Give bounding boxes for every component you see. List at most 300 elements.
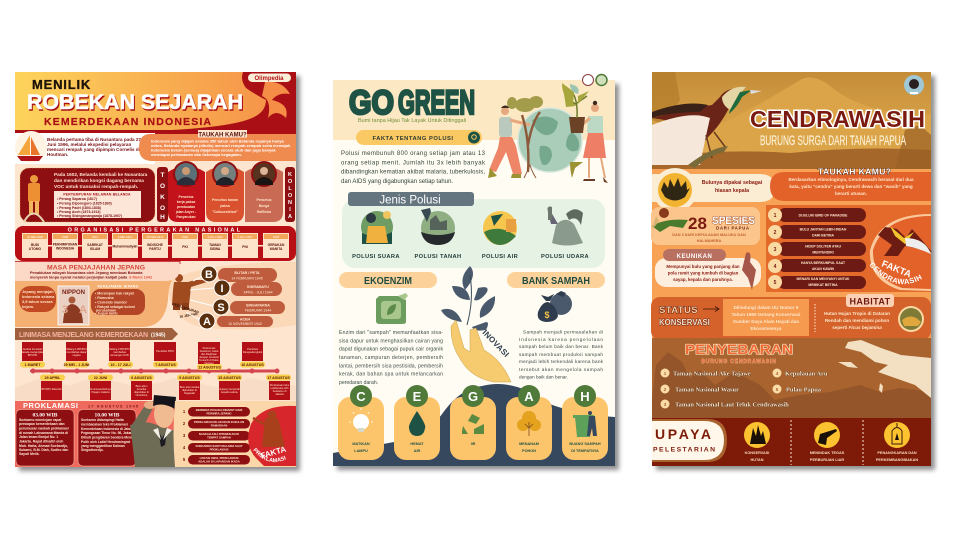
heading: fakta tentang polusi	[356, 130, 482, 145]
card: E: HEMAT	[410, 442, 424, 446]
panel: status konservasi and habitat: KONSERVASI	[659, 318, 710, 327]
header scene	[652, 72, 931, 169]
icon: sail ship	[17, 135, 43, 161]
item: konservasi hutan	[744, 422, 770, 462]
panel: organisasi pergerakan nasional: 20 MEI 1908	[27, 235, 43, 239]
panel: status konservasi and habitat: Ekosistemnya	[751, 326, 782, 331]
icon: Japanese soldier: DI JEPANG	[179, 312, 198, 319]
list: fakta proklamasi: PERWIRA JEPANG	[206, 411, 232, 415]
title	[27, 77, 244, 128]
card: A: MENANAM	[519, 442, 539, 446]
heading: habitat	[846, 294, 894, 307]
potted plant	[562, 83, 589, 133]
chart: timeline: Rengasdengklok	[243, 350, 263, 354]
list: kekejaman Jepang: KEKEJAMAN JEPANG	[98, 284, 139, 288]
panel: penyebaran with map: Kepulauan Aru	[785, 370, 828, 378]
fact strip with ship icon	[15, 131, 155, 164]
title: go green: GREEN	[398, 84, 475, 122]
chart: timeline: Amerika	[137, 387, 147, 391]
icon: bird on branch	[652, 208, 688, 232]
panel: organisasi pergerakan nasional: 6 MEI 1912	[118, 235, 133, 239]
panel: organisasi pergerakan nasional: 1908	[62, 235, 69, 239]
poster: Nippon: 3	[62, 304, 68, 316]
callout: 3.5 tahun: Indonesia selama	[22, 294, 55, 299]
logo: Olimpedia: Olimpedia	[254, 76, 284, 82]
card: Daendels: Pencetus	[178, 195, 194, 199]
panel: fakta cendrawasih: DARI BETINA	[812, 234, 834, 238]
panel: organisasi pergerakan nasional	[15, 226, 296, 261]
chart: timeline: 15 AGUSTUS	[218, 376, 241, 380]
text: ekoenzim: dapat digunakan sebagai pupuk cair organik	[339, 346, 443, 352]
panel: organisasi pergerakan nasional: PKI	[182, 245, 188, 249]
callout: taukah kamu	[139, 130, 296, 161]
panel: masa penjajahan jepang: MASA PENJAJAHAN JEPANG	[47, 264, 145, 272]
card: 03.00 WIB: persiapan kemerdekaan dan	[19, 422, 65, 426]
text: bank sampah: Sampah menjadi permasalahan di	[523, 330, 603, 334]
item: penangkaran	[876, 422, 918, 462]
panel: fakta cendrawasih: 3	[774, 247, 777, 253]
text: ekoenzim: tanaman, campuran deterjen, pembersih	[339, 355, 443, 361]
panel: organisasi pergerakan nasional: SAREKAT	[87, 243, 103, 247]
text: ekoenzim: kerak, dan bahan spa untuk melancarkan	[339, 372, 443, 378]
card: 03.00 WIB	[16, 410, 74, 466]
text: bank sampah: dengan baik dan benar.	[519, 374, 568, 380]
title: cendrawasih	[750, 106, 925, 148]
callout: 3.5 tahun: kejam.	[22, 304, 34, 309]
panel: status konservasi and habitat	[651, 294, 931, 340]
chart: timeline: 1 MARET	[25, 363, 41, 367]
panel: fakta cendrawasih: 5	[774, 280, 777, 286]
item: menindak tegas perburuan liar: PERBURUAN LIAR	[810, 458, 844, 462]
list: fakta proklamasi: 3	[183, 433, 186, 438]
panel: upaya pelestarian: UPAYA	[655, 426, 711, 442]
panel: VOC: • Perang Aceh (1873-1913)	[57, 210, 101, 214]
chart: timeline: Soekarno di	[273, 389, 287, 393]
item: S	[190, 299, 285, 315]
callout: taukah kamu: kata, yaitu "cendra" yang berarti dewa dan "wasih" yang	[789, 184, 913, 189]
panel: status konservasi and habitat: seperti Ficus bejamina	[832, 325, 882, 330]
title: go green: Bumi tanpa Hijau Tak Layak Untuk Ditinggali	[358, 118, 466, 124]
card: Daendels: jalan Anyer -	[175, 210, 196, 214]
item: A: 10 NOVEMBER 1942	[228, 322, 262, 326]
tokoh cards	[157, 161, 295, 222]
card: Daendels: kerja paksa	[177, 200, 195, 204]
panel: penyebaran with map: 3	[664, 402, 667, 407]
logo: Olimpedia	[248, 74, 291, 82]
callout: taukah kamu	[770, 166, 931, 201]
chart: timeline: kepada sekutu	[221, 390, 238, 394]
cards: CEGAH	[338, 385, 608, 460]
panel: keunikan: Mempunyai bulu yang panjang dan	[666, 264, 740, 269]
callout: taukah kamu: TAUKAH KAMU?	[198, 132, 247, 138]
tokoh cards: H	[160, 214, 165, 221]
card: E: AIR	[414, 449, 421, 453]
list: fakta proklamasi: 5	[183, 457, 186, 462]
panel: sejarah kemerdekaan poster	[15, 72, 296, 467]
panel: fakta cendrawasih: HIDUP SOLITER ATAU	[805, 244, 841, 248]
chart: timeline: Piagam Jakarta	[91, 390, 110, 394]
panel: fakta cendrawasih: MEMIKAT BETINA	[808, 283, 838, 287]
list: fakta proklamasi: ADALAH DI LAPANGAN IKADA	[198, 459, 240, 463]
item: penangkaran: PERKEMBANGBIAKAN	[876, 458, 918, 462]
callout: taukah kamu: Indonesia belum (semua) dijajahkan secara utuh dan juga banyak	[151, 148, 276, 152]
badge: fakta proklamasi	[248, 406, 296, 466]
card: 03.00 WIB: 03.00 WIB	[33, 412, 58, 418]
heading: ekoenzim: EKOENZIM	[364, 276, 412, 287]
illustration: hand with plant (inovasi)	[441, 266, 511, 382]
panel: upaya pelestarian	[652, 418, 931, 466]
panel: masa penjajahan jepang: menyerah tanpa syarat melalui perjanjian kalijati pada	[30, 276, 128, 280]
chart: timeline: Pembacaan teks	[270, 383, 290, 387]
text: bank sampah: Indonesia karena pengelolaan	[519, 337, 603, 342]
text: fakta polusi: dan AIDS yang digabungkan setiap tahun.	[341, 179, 453, 185]
chart: timeline: dan Radjiman	[201, 352, 218, 356]
panel: penyebaran with map: 2	[664, 387, 667, 392]
list: fakta proklamasi: BENDERA PUSAKA DIDAPAT DARI	[196, 408, 243, 412]
panel: penyebaran with map: Taman Nasional Laut Teluk Cendrawasih	[675, 402, 789, 408]
list: kekejaman Jepang: • Jugun Ianfu	[95, 312, 118, 316]
bottom hill	[333, 384, 615, 466]
panel: go green poster	[333, 74, 615, 466]
chart: timeline: 17 AGUSTUS	[267, 376, 290, 380]
item: konservasi hutan: KONSERVASI	[745, 451, 769, 455]
icon: feather headdress	[661, 178, 690, 200]
card: Daendels	[168, 161, 205, 222]
card: C	[338, 385, 384, 460]
card: Raffles: Pencetus	[256, 198, 272, 202]
card: 03.00 WIB: Soekarno meminjam rapat	[19, 418, 62, 422]
panel: fakta cendrawasih: HANYA BERKUMPUL SAAT	[801, 261, 846, 265]
banner: linimasa: (1945)	[151, 332, 166, 338]
tokoh cards: T	[161, 172, 165, 179]
tokoh cards: K	[288, 172, 292, 178]
panel: fakta cendrawasih: AKAN KAWIN	[812, 267, 835, 271]
chart: timeline: Hiroshima	[136, 393, 148, 397]
panel: organisasi pergerakan nasional: TAMAN	[209, 243, 221, 247]
chart: timeline: Harada menjanjikan	[21, 350, 45, 354]
panel: organisasi pergerakan nasional: 25 DES 1912	[147, 235, 164, 239]
title: go green	[349, 84, 475, 124]
callout: taukah kamu: mitos. Belanda nyatanya (ditulis) mencari rempah-rempah serta memajah	[151, 143, 291, 148]
chart: timeline: membahas dasar	[66, 350, 87, 354]
text: bank sampah: tersebut akan mengelola sampah	[519, 367, 603, 372]
item: penangkaran: PENANGKARAN DAN	[877, 451, 917, 455]
text: fakta polusi: dibandingkan kematian akibat malaria, tuberkulosis,	[341, 170, 485, 176]
chart: timeline: Bom atom	[136, 384, 147, 388]
panel: penyebaran with map: Taman Nasional Ake Tajawe	[673, 370, 751, 378]
text: ekoenzim: Enzim dari "sampah" memanfaatkan sisa-	[339, 330, 443, 336]
icon: polusi udara	[548, 207, 583, 246]
chart: timeline: 10 - 17 JULI	[111, 363, 130, 367]
tokoh cards: K	[160, 194, 165, 201]
card: H: BUANG SAMPAH	[569, 442, 601, 446]
panel: fakta cendrawasih: 2	[774, 230, 777, 236]
panel: penyebaran with map: PENYEBARAN	[685, 341, 793, 357]
badge: fakta proklamasi: FAKTA	[260, 445, 287, 461]
panel: organisasi pergerakan nasional: WANITA	[270, 247, 283, 251]
card: C: C	[356, 389, 366, 404]
logo: avatar	[904, 75, 924, 95]
chart: timeline: BPUPKI dibentuk	[41, 387, 62, 391]
panel: fakta cendrawasih: MENARI DAN MENYANYI UNTUK	[796, 277, 850, 281]
list: fakta proklamasi: PROKLAMASI DILAKUKAN DI BULAN	[194, 420, 244, 424]
panel: upaya pelestarian: PELESTARIAN	[653, 446, 715, 454]
item: S: SINGAPARNA	[246, 304, 270, 308]
panel: penyebaran with map	[652, 338, 931, 418]
tokoh cards: A	[288, 214, 292, 220]
panel: jenis polusi: POLUSI AIR	[482, 254, 518, 260]
chart: timeline: 7 AGUSTUS	[155, 363, 176, 367]
tokoh cards: O	[288, 193, 293, 199]
panel: proklamasi: PROKLAMASI	[23, 401, 78, 410]
map: Papua	[838, 340, 931, 398]
panel: fakta cendrawasih: DIJULUKI BIRD OF PARADISE	[799, 214, 848, 218]
chart: timeline: proklamasi oleh	[270, 386, 289, 390]
panel: 28 spesies: DARI PAPUA	[716, 226, 750, 230]
panel: VOC: Pada 1602, Belanda kembali ke Nusantara	[54, 172, 148, 177]
list: fakta proklamasi: NASKAH ASLI DITEMUKAN DI	[199, 432, 239, 436]
item: I: APRIL - JULI 1944	[243, 290, 273, 294]
card: Van den Bosch: paksa	[220, 204, 230, 208]
card: 10.00 WIB	[78, 410, 136, 466]
text: bank sampah: menjadi lebih terkendali karena bank	[519, 359, 604, 364]
chart: timeline: membahas	[113, 350, 127, 354]
tokoh cards: O	[160, 183, 165, 190]
list: fakta proklamasi: 2	[183, 421, 186, 426]
list: fakta proklamasi: LOKASI AWAL PROKLAMASI	[200, 456, 239, 460]
icon: small bird	[742, 252, 756, 290]
text: bank sampah: sampah belum baik dan benar. Bank	[519, 344, 604, 349]
item: I	[190, 280, 282, 296]
icon: flying bird	[878, 227, 932, 256]
panel: organisasi pergerakan nasional: GERAKAN	[268, 243, 285, 247]
panel: organisasi pergerakan nasional: 1928	[273, 235, 280, 239]
chart: timeline: Perumusan/lahirnya	[89, 387, 113, 391]
card: Van den Bosch: "Cultuurstelsel"	[212, 210, 238, 214]
card: A: POHON	[522, 449, 536, 453]
chart: timeline: 12 AGUSTUS	[198, 366, 221, 370]
panel: VOC: • Perang Sisingamangaraja (1878-1907)	[57, 214, 122, 218]
item: konservasi hutan: HUTAN	[750, 458, 764, 462]
card: Van den Bosch	[206, 161, 244, 222]
fact strip with ship icon: Belanda pertama tiba di Nusantara pada 27	[47, 137, 141, 142]
heading: bank sampah	[507, 272, 605, 288]
figure: Soekarno saluting	[130, 395, 176, 467]
panel: 28 spesies: SPESIES	[712, 215, 755, 227]
list: fakta proklamasi: TEMPAT SAMPAH	[207, 435, 231, 439]
chart: timeline: BPUPKI	[28, 353, 38, 357]
panel: status konservasi and habitat: Tahun 1990 tentang Konservasi	[732, 312, 800, 317]
item: B	[193, 266, 277, 282]
panel: fakta cendrawasih: MENYENDIRI	[812, 250, 834, 254]
panel: organisasi pergerakan nasional: PERHIMPUNAN	[53, 242, 78, 246]
list: fakta proklamasi: 4	[183, 445, 186, 450]
card: H: DI TEMPATNYA	[571, 449, 599, 453]
panel: status konservasi and habitat: Hutan Hujan Tropis di Dataran	[824, 311, 890, 316]
card: 10.00 WIB: Soekarno didampingi Hatta	[81, 418, 124, 422]
icon: Japanese soldier	[172, 274, 207, 319]
panel: organisasi pergerakan nasional: INDISCHE	[147, 243, 164, 247]
panel: organisasi pergerakan nasional: 3 JULI 1922	[207, 235, 223, 239]
panel: organisasi pergerakan nasional: SISWA	[210, 247, 221, 251]
chart: timeline: Pendirian PPKI	[156, 349, 174, 353]
card: 10.00 WIB: Kemerdekaan Indonesia di Jalan	[81, 427, 132, 431]
chart: timeline: Peristiwa	[247, 347, 258, 351]
card: 10.00 WIB: Diikuti pengibaran bendera Merah	[81, 436, 134, 440]
panel: organisasi pergerakan nasional: PARTIJ	[149, 247, 161, 251]
panel: fakta cendrawasih	[766, 205, 932, 292]
card: Raffles: Bunga	[259, 204, 269, 208]
callout: taukah kamu: berarti utusan.	[835, 191, 867, 196]
card: G: 3R	[471, 442, 476, 446]
panel: keunikan	[655, 249, 761, 290]
card: 03.00 WIB: Sukarni, B.M. Diah, Sudiro dan	[19, 448, 68, 452]
item: I: INDRAMAYU	[247, 285, 269, 289]
title: ROBEKAN SEJARAH	[28, 92, 244, 116]
panel: 28 spesies: 28	[688, 214, 707, 233]
poster: Nippon: A	[79, 304, 87, 316]
card: 10.00 WIB: 10.00 WIB	[95, 412, 120, 418]
icon: money bags	[538, 291, 572, 322]
panel: VOC: • Perang Diponegoro (1825-1830)	[57, 202, 112, 206]
panel: organisasi pergerakan nasional: BUDI	[31, 243, 39, 247]
panel: BISA resistance	[165, 262, 296, 329]
chart: timeline: negara	[72, 353, 81, 357]
chart: timeline: rancangan UUD	[110, 353, 129, 357]
panel: organisasi pergerakan nasional: 1920	[182, 235, 189, 239]
panel: jenis polusi	[342, 192, 605, 268]
panel: organisasi pergerakan nasional: Muhammadiyah	[113, 244, 137, 248]
panel: status konservasi and habitat: Rendah dan mendiami pohon	[825, 318, 889, 323]
panel: proklamasi: 17 AGUSTUS 1945	[88, 404, 139, 408]
card: A	[506, 385, 552, 460]
panel: VOC: • Perang Saparua (1817)	[57, 197, 97, 201]
list: fakta proklamasi: PROKLAMASI	[210, 447, 229, 451]
heading: bank sampah: BANK SAMPAH	[522, 276, 590, 287]
item: B: 14 FEBRUARI 1945	[231, 276, 263, 280]
item: A: A	[203, 316, 211, 328]
title: KEMERDEKAAN INDONESIA	[44, 116, 211, 128]
badge: fakta proklamasi: PROKLAMASI	[253, 448, 286, 462]
text: ekoenzim: sisa dapur untuk menghasilkan cairan yang	[339, 338, 443, 344]
chart: timeline: 6 AGUSTUS	[131, 376, 152, 380]
panel: jenis polusi: Jenis Polusi	[379, 194, 441, 206]
card: E: E	[413, 389, 422, 404]
badge: fakta cendrawasih: CENDRAWASIH	[870, 262, 922, 284]
panel: VOC: PERTEMPURAN MELAWAN BELANDA	[63, 192, 131, 196]
callout: 3.5 tahun: 3,5 tahun secara	[22, 299, 53, 304]
panel: keunikan: sayap, kepala dan paruhnya.	[673, 277, 733, 282]
card: 03.00 WIB: di rumah Laksamana Maeda di	[19, 431, 68, 435]
chart: timeline: Vietnam	[204, 361, 214, 365]
callout: 3.5 tahun	[19, 286, 56, 312]
list: kekejaman Jepang: • Merampas hak rakyat	[95, 292, 135, 296]
list: fakta proklamasi: 1	[183, 409, 186, 414]
chart: timeline: dijatuhkan di	[182, 388, 197, 392]
panel: jenis polusi: POLUSI TANAH	[414, 254, 462, 260]
fact strip with ship icon: mencari rempah yang dipimpin Cornelis de	[47, 147, 142, 152]
card: 03.00 WIB: Moh. Hatta, Ahmad Soebardjo,	[19, 444, 68, 448]
panel: keunikan: KEUNIKAN	[677, 254, 712, 260]
tokoh cards: I	[289, 207, 291, 213]
panel: masa penjajahan jepang: 8 Maret 1942	[129, 276, 152, 280]
panel: penyebaran with map: BURUNG CENDRAWASIH	[701, 359, 777, 365]
chart: timeline: Sidang 1 BPUPKI	[66, 347, 87, 351]
tokoh cards: N	[288, 200, 292, 206]
panel: organisasi pergerakan nasional: UTOMO	[29, 247, 42, 251]
card: C: MATIKAN	[352, 442, 370, 446]
tokoh cards: O	[160, 205, 165, 212]
list: kekejaman Jepang: • Romusha	[95, 296, 115, 300]
title: ROBEKAN SEJARAH	[27, 91, 243, 114]
panel: keunikan: pola rumit yang tumbuh di bagian	[668, 270, 739, 276]
text: bank sampah: sampah membuat produksi sampah	[519, 352, 603, 357]
panel: penyebaran with map: Taman Nasional Wasur	[675, 386, 739, 394]
chart: timeline: Sidang 2 BPUPKI	[109, 347, 130, 351]
list: kekejaman Jepang: • Cenreido mandor	[95, 300, 128, 304]
panel: VOC: VOC untuk transaksi rempah-rempah.	[54, 184, 138, 189]
panel: 28 spesies	[651, 207, 760, 245]
card: Raffles	[245, 161, 283, 222]
callout: taukah kamu: Berdasarkan etimologinya, Cendrawasih berasal dari dua	[788, 177, 914, 182]
panel: organisasi pergerakan nasional: 4 JULI 1927	[237, 235, 253, 239]
chart: timeline: Terauchi di Dalat,	[199, 358, 219, 362]
shadows behind posters	[19, 76, 935, 471]
icon: polusi tanah	[421, 208, 455, 245]
badge: fakta cendrawasih: FAKTA	[880, 259, 913, 280]
chart: timeline: 9 AGUSTUS	[179, 376, 200, 380]
text: fakta polusi: Polusi membunuh 800 orang setiap jam atau 13	[341, 151, 486, 157]
panel: 28 spesies: DAN 3 DARI KEPULAUAN MALUKU DAN	[672, 233, 746, 237]
card: Daendels: pembuatan	[177, 205, 195, 209]
logos	[582, 74, 607, 86]
card: 03.00 WIB: Jakarta. Rapat dihadiri oleh	[19, 440, 63, 444]
tokoh cards: L	[288, 186, 292, 192]
poster: Nippon: NIPPON	[62, 290, 85, 296]
item: I: I	[220, 283, 224, 295]
text: ekoenzim: peredaran darah.	[339, 380, 378, 386]
panel: VOC: • Perang Padri (1803-1838)	[57, 206, 101, 210]
card: H	[562, 385, 608, 460]
panel: fakta cendrawasih: BULU JANTAN LEBIH INDAH	[800, 228, 847, 232]
icon: colonial soldier	[24, 175, 44, 222]
panel: organisasi pergerakan nasional: ORGANISASI PERGERAKAN NASIONAL	[68, 228, 242, 234]
item: S: FEBRUARI 1944	[245, 308, 271, 312]
list: fakta proklamasi: SOEKARNO SAKIT MALARIA SAAT	[195, 444, 243, 448]
panel: status konservasi and habitat: Sumber Daya Alam Hayati dan	[733, 319, 799, 324]
card: C: LAMPU	[354, 449, 368, 453]
card: 03.00 WIB: Sayuti Melik.	[19, 452, 40, 456]
item: menindak tegas perburuan liar: MENINDAK TEGAS	[810, 451, 845, 455]
panel: jenis polusi: POLUSI UDARA	[541, 254, 589, 260]
card: 03.00 WIB: perumusan naskah proklamasi	[19, 426, 69, 430]
item: S: S	[217, 302, 225, 314]
panel: penyebaran with map: 1	[664, 371, 667, 376]
heading: habitat: HABITAT	[850, 296, 891, 306]
panel: masa penjajahan jepang: Penaklukan wilayah Nusantara oleh Jepang membuat Belanda	[30, 271, 143, 275]
chart: timeline: 22 JUNI	[94, 376, 107, 380]
tree held by person	[507, 96, 543, 178]
panel: fakta cendrawasih: 1	[774, 213, 777, 219]
person: right	[576, 101, 608, 183]
text: fakta polusi: orang setiap menit. Jumlah itu 3x lebih banyak	[341, 160, 486, 166]
panel: fakta cendrawasih: 4	[774, 264, 777, 270]
panel: jenis polusi: POLUSI SUARA	[352, 254, 400, 260]
badge: fakta cendrawasih	[870, 214, 932, 291]
fact strip with ship icon: Houtman.	[47, 152, 68, 157]
chart: timeline: Soekarno, Hatta	[200, 349, 219, 353]
fact: hiasan kepala: hiasan kepala	[715, 188, 749, 194]
